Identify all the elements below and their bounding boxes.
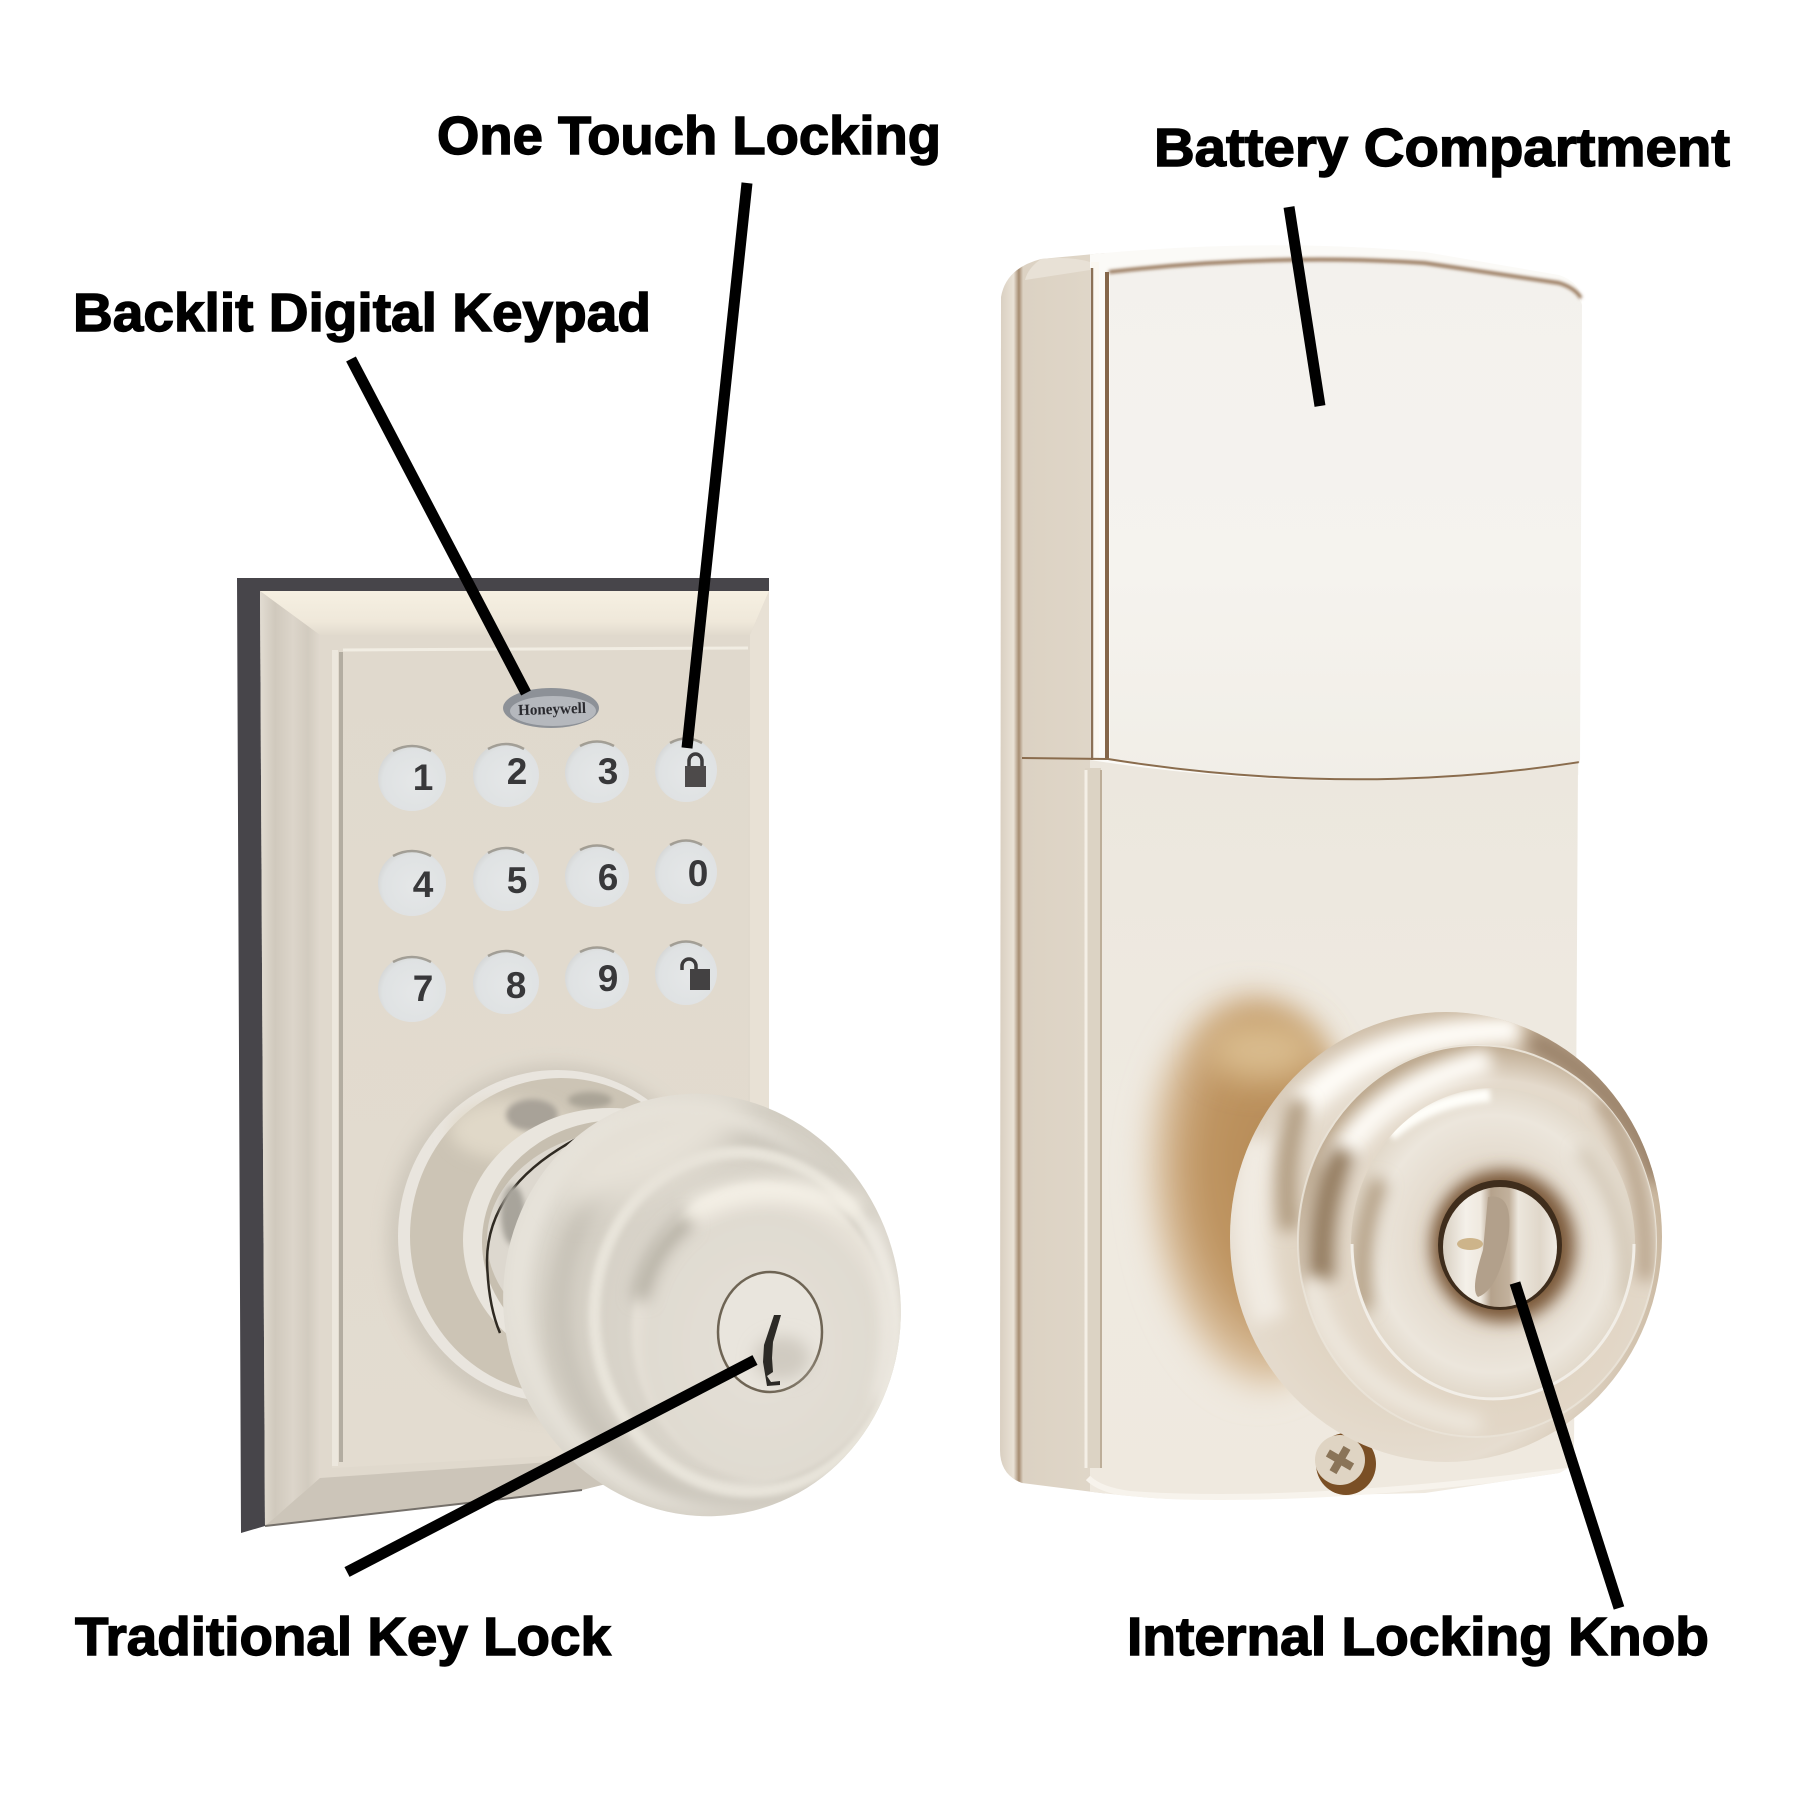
exterior knob	[503, 1096, 901, 1516]
key 5	[473, 847, 539, 911]
keypad buttons	[378, 738, 717, 1022]
callout line: Traditional Key Lock	[347, 1360, 755, 1572]
mounting screw	[1315, 1433, 1376, 1495]
keypad lock (exterior side)	[237, 578, 945, 1559]
battery pack lock (interior side)	[1000, 235, 1662, 1525]
key 1	[378, 745, 446, 811]
key 3	[565, 741, 629, 803]
key 7: 7	[413, 968, 433, 1009]
key 6	[565, 845, 629, 907]
Honeywell logo badge: Honeywell	[518, 700, 587, 719]
label: Traditional Key Lock: Traditional Key Lock	[75, 1607, 612, 1667]
lock body silhouette and side	[1000, 253, 1105, 1494]
key lock icon	[655, 738, 717, 802]
label: One Touch Locking: One Touch Locking	[437, 106, 941, 166]
knob middle ring	[1298, 1045, 1656, 1437]
lower body	[1022, 758, 1580, 1500]
key 2	[473, 743, 539, 807]
key 9	[565, 947, 629, 1009]
key 2: 2	[507, 751, 527, 792]
label: Internal Locking Knob: Internal Locking Knob	[1127, 1607, 1709, 1667]
key 8	[473, 950, 539, 1014]
key 4: 4	[413, 864, 434, 905]
knob shadow and spindle	[1142, 997, 1362, 1393]
key 9: 9	[598, 958, 618, 999]
knob inner dome	[1351, 1088, 1635, 1400]
key 4	[378, 850, 446, 916]
key 1: 1	[413, 757, 433, 798]
label: Battery Compartment: Battery Compartment	[1154, 118, 1730, 178]
dark mounting back plate	[237, 578, 769, 1533]
key 3: 3	[598, 751, 618, 792]
key 0	[655, 840, 717, 904]
label: Backlit Digital Keypad: Backlit Digital Keypad	[73, 283, 651, 343]
knob collar	[398, 1070, 648, 1399]
plate shadow around collar	[387, 1064, 723, 1416]
Honeywell logo badge	[503, 688, 599, 728]
key 8: 8	[506, 965, 526, 1006]
key 5: 5	[507, 860, 527, 901]
battery compartment cover	[1025, 258, 1582, 781]
key unlock icon	[655, 941, 717, 1005]
key 0: 0	[688, 853, 708, 894]
callout line: One Touch Locking	[687, 183, 747, 748]
thumb turn locking knob	[1431, 1170, 1575, 1322]
key 7	[378, 956, 446, 1022]
callout line: Battery Compartment	[1289, 207, 1320, 406]
key cylinder and keyway	[718, 1272, 822, 1392]
callout line: Backlit Digital Keypad	[351, 359, 526, 693]
keypad panel	[332, 648, 748, 1468]
beveled escutcheon plate	[260, 591, 769, 1526]
callout line: Internal Locking Knob	[1515, 1283, 1619, 1608]
interior knob	[1230, 1012, 1662, 1462]
key 6: 6	[598, 857, 618, 898]
